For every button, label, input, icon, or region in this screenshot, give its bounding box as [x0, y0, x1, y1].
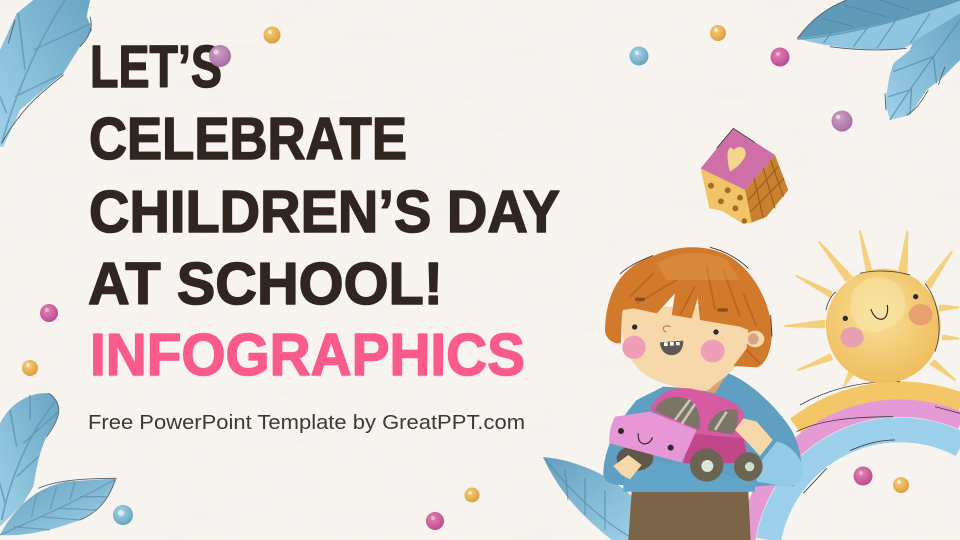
boy left hand: [613, 455, 642, 479]
boy trousers: [628, 492, 751, 540]
boy hair: [605, 247, 772, 367]
icon: house shaped block: [701, 128, 788, 224]
title: CELEBRATE: [89, 106, 407, 172]
icon: leaves bottom left: [0, 393, 117, 535]
boy neck: [707, 372, 728, 393]
title: CHILDREN’S DAY: [89, 179, 560, 245]
icon: smiling sun: [785, 231, 959, 385]
subtitle: infographics: INFOGRAPHICS: [90, 322, 525, 388]
boy eyes and brows: [632, 298, 728, 335]
boy ear: [746, 331, 764, 347]
title: AT SCHOOL!: [88, 251, 443, 317]
illustration: boy holding toy car: [603, 247, 803, 540]
title: [88, 34, 560, 317]
icon: leaf beside boy: [543, 457, 640, 540]
title: LET’S: [90, 34, 222, 100]
icon: rainbow: [747, 382, 960, 540]
credit line: Free PowerPoint Template by GreatPPT.com: [88, 412, 525, 434]
boy right hand: [735, 418, 773, 456]
boy face: [621, 307, 754, 391]
boy mouth: [660, 341, 683, 355]
icon: leaf top left: [0, 0, 92, 147]
boy sweater: [603, 373, 801, 492]
boy nose: [663, 326, 671, 332]
boy cheeks: [622, 336, 725, 362]
icon: leaves top right: [797, 0, 960, 120]
toy car: [609, 388, 763, 482]
